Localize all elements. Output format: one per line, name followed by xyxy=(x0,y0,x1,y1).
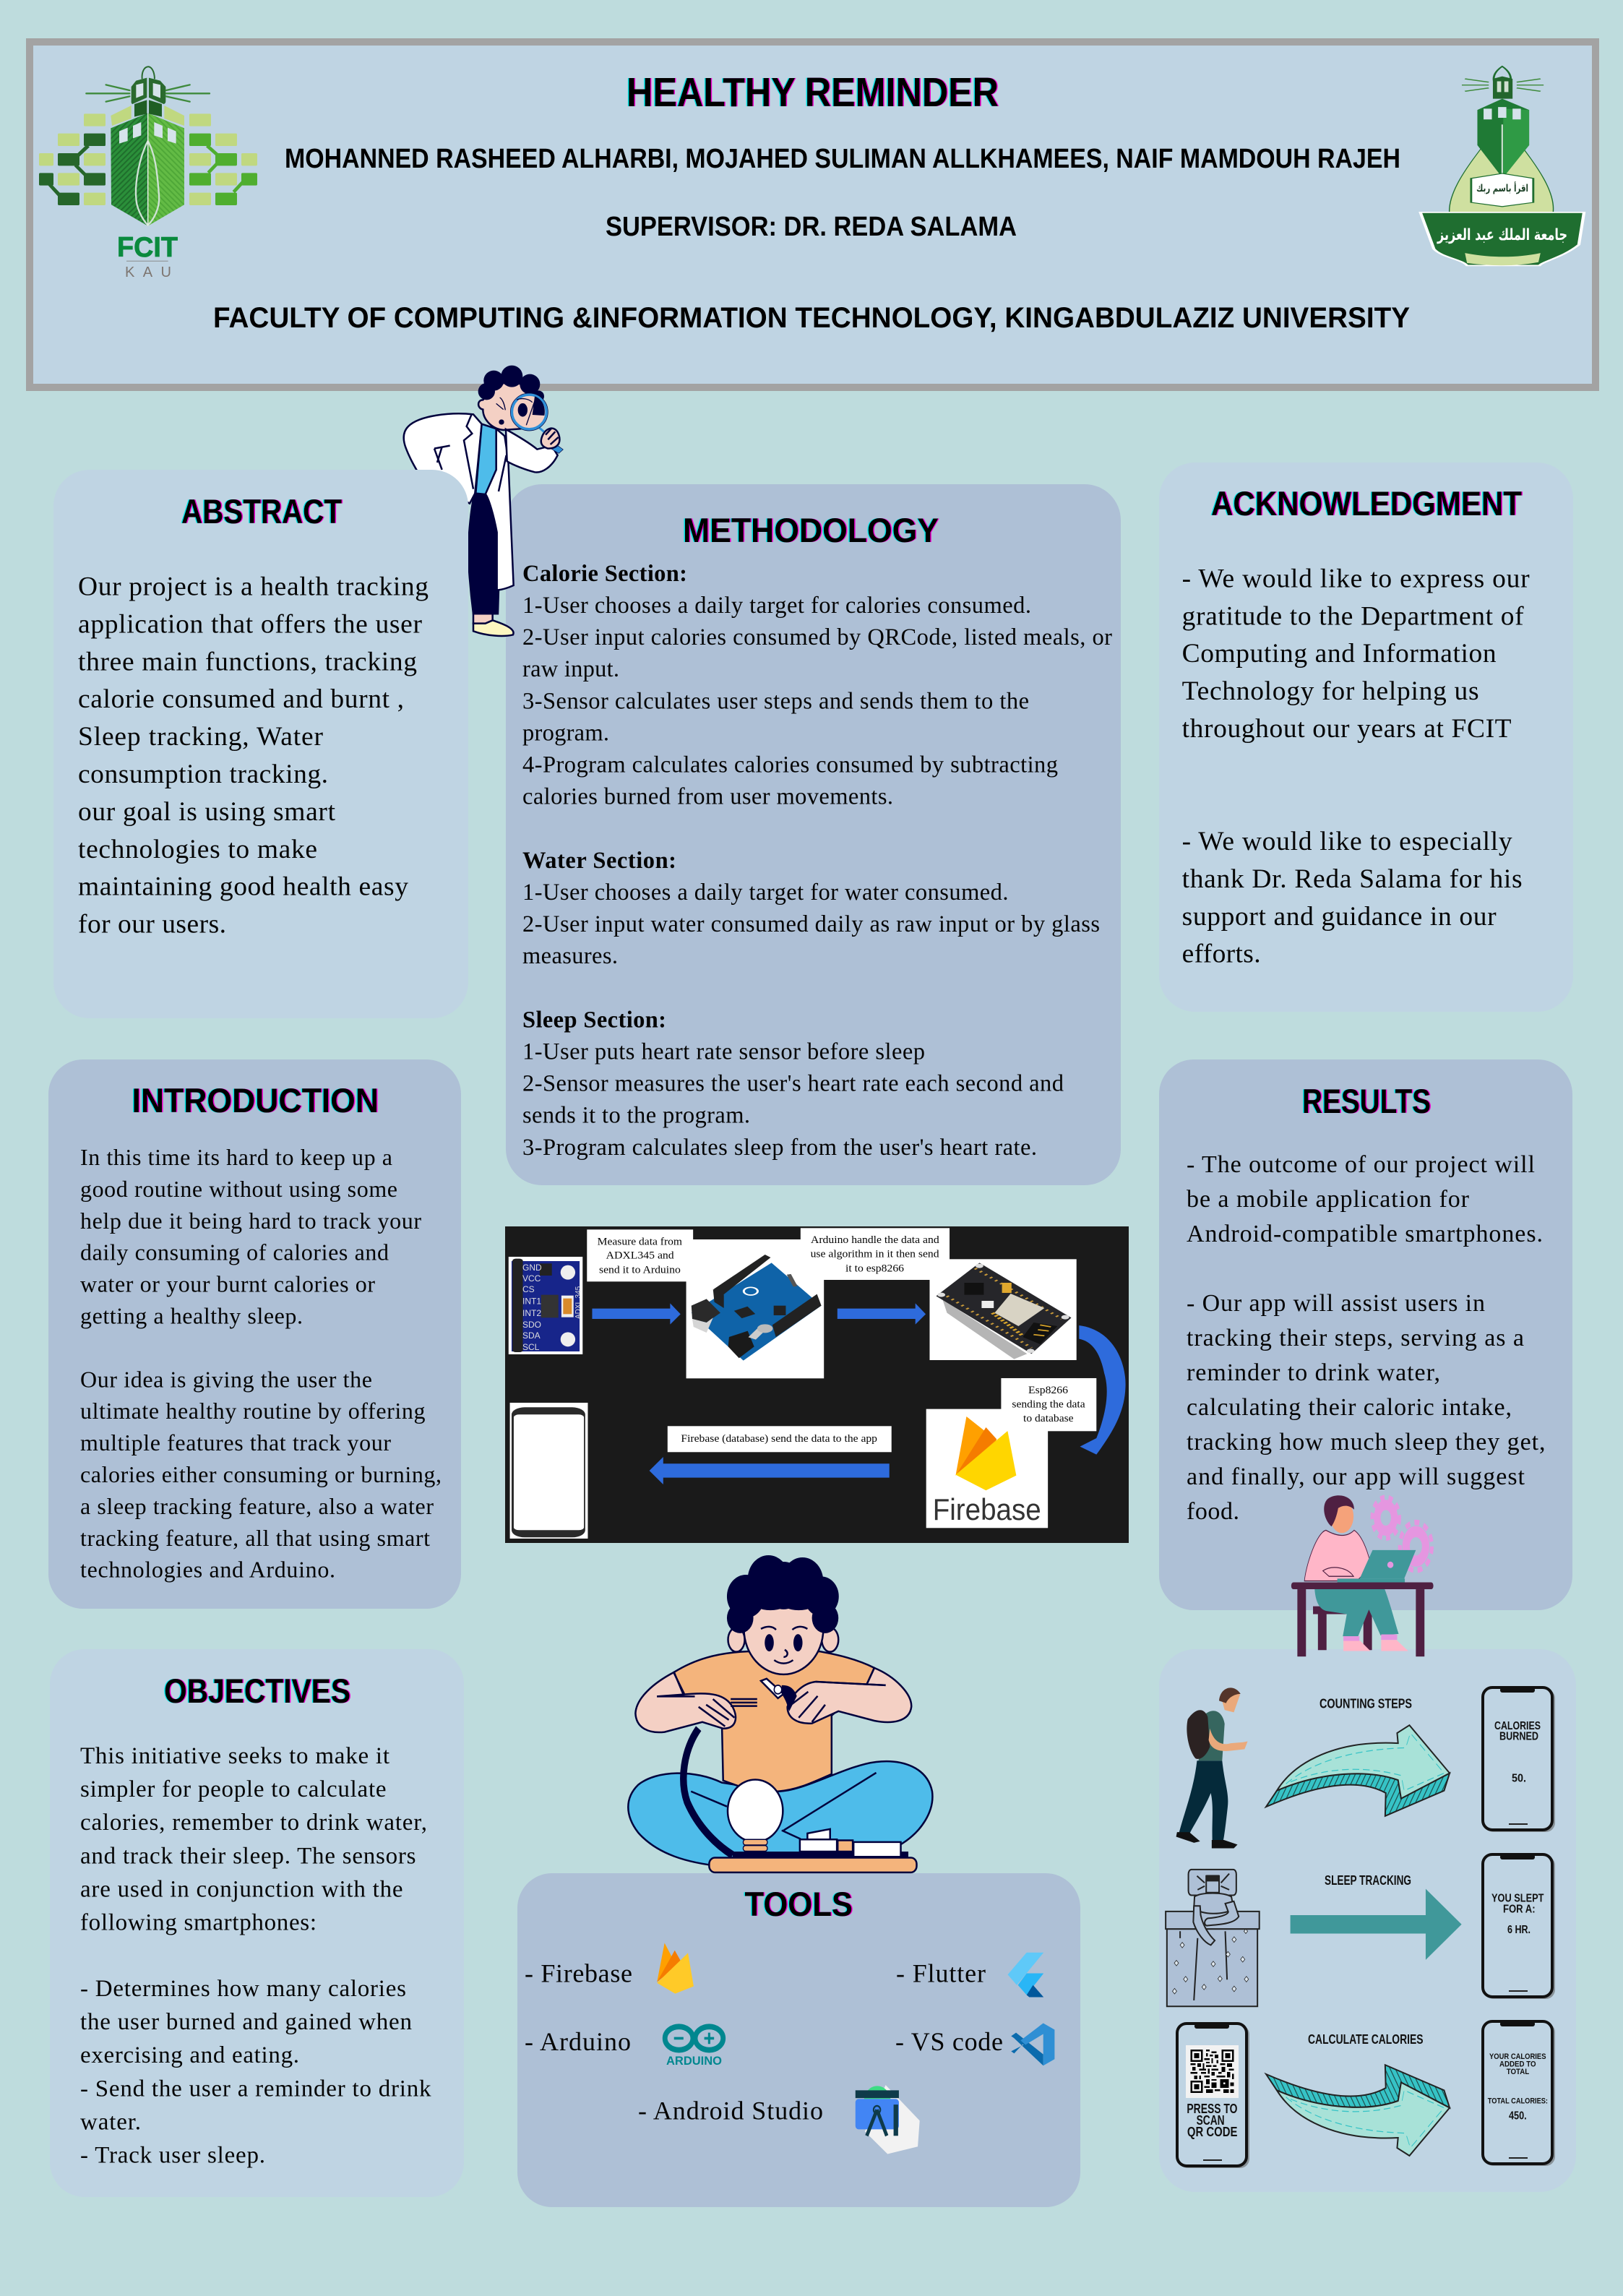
phone: scan QR code: SCAN xyxy=(1197,2113,1225,2128)
body text: program. xyxy=(522,720,609,746)
phone: you slept: 6 HR. xyxy=(1507,1924,1531,1936)
heading: INTRODUCTION xyxy=(132,1081,379,1119)
tool labels: - Arduino xyxy=(525,2027,631,2056)
phone: total calories: TOTAL CALORIES: xyxy=(1488,2097,1548,2106)
body text: consumption tracking. xyxy=(78,760,328,789)
body text: - Send the user a reminder to drink xyxy=(80,2076,431,2102)
heading: RESULTS xyxy=(1302,1082,1431,1120)
tool labels xyxy=(525,1959,1003,2125)
body text: tracking how much sleep they get, xyxy=(1187,1429,1545,1456)
curved arrow xyxy=(1079,1325,1126,1455)
caption: esp8266: sending the data xyxy=(1012,1398,1085,1410)
body text: food. xyxy=(1187,1498,1239,1525)
body text: reminder to drink water, xyxy=(1187,1359,1440,1386)
body text: - We would like to express our xyxy=(1182,564,1530,593)
caption: measure: Measure data from xyxy=(598,1236,682,1247)
icon: vs code xyxy=(1011,2023,1054,2065)
firebase image xyxy=(926,1409,1048,1528)
tool labels: - Flutter xyxy=(896,1959,986,1987)
body text: thank Dr. Reda Salama for his xyxy=(1182,864,1523,894)
body text: 3-Program calculates sleep from the user's heart rate. xyxy=(522,1135,1037,1161)
phone: total calories: TOTAL xyxy=(1507,2068,1529,2076)
sensor pin labels: VCC xyxy=(522,1273,541,1284)
body text: Water Section: xyxy=(522,848,676,874)
arrow xyxy=(650,1457,890,1484)
body text: 1-User chooses a daily target for calories consumed. xyxy=(522,593,1031,619)
body text: Calorie Section: xyxy=(522,561,687,587)
caption: measure xyxy=(598,1236,682,1276)
sensor pin labels: SDO xyxy=(522,1320,541,1330)
sensor pin labels: INT1 xyxy=(522,1297,541,1307)
body text: Android-compatible smartphones. xyxy=(1187,1221,1543,1247)
heading: METHODOLOGY xyxy=(683,511,939,549)
body text: efforts. xyxy=(1182,940,1261,969)
arrow xyxy=(592,1303,681,1325)
body text: three main functions, tracking xyxy=(78,647,417,676)
phone image xyxy=(510,1403,587,1539)
body text: - Track user sleep. xyxy=(80,2142,265,2168)
phone: you slept: FOR A: xyxy=(1503,1904,1536,1916)
phone: calories burned: 50. xyxy=(1512,1773,1526,1785)
phone: total calories: 450. xyxy=(1509,2110,1527,2122)
sensor image xyxy=(509,1257,582,1354)
body text xyxy=(80,1743,431,2168)
body text: daily consuming of calories and xyxy=(80,1239,389,1265)
body text: our goal is using smart xyxy=(78,797,336,827)
panel: introduction xyxy=(48,1059,461,1609)
icon: flutter xyxy=(1008,1953,1043,1997)
phone: you slept xyxy=(1483,1854,1555,1999)
caption: measure: ADXL345 and xyxy=(606,1250,674,1262)
body text: ultimate healthy routine by offering xyxy=(80,1398,425,1424)
sensor pin labels: ADXL 345 xyxy=(574,1286,582,1319)
label: sleep tracking: SLEEP TRACKING xyxy=(1325,1873,1411,1888)
body text: for our users. xyxy=(78,910,226,940)
panel: results xyxy=(1159,1059,1572,1610)
body text: - We would like to especially xyxy=(1182,827,1512,856)
arrow xyxy=(838,1303,926,1325)
heading: OBJECTIVES xyxy=(164,1672,350,1710)
icon: QR code xyxy=(1191,2050,1234,2093)
body text: maintaining good health easy xyxy=(78,872,408,902)
body text: 2-User input water consumed daily as raw input or by glass xyxy=(522,911,1100,937)
curved arrow: calories xyxy=(1266,2065,1450,2156)
character: scientist with magnifying glass xyxy=(404,366,563,636)
body text: water or your burnt calories or xyxy=(80,1271,375,1297)
icon: firebase xyxy=(657,1943,694,1994)
body text: getting a healthy sleep. xyxy=(80,1302,303,1328)
body text: tracking feature, all that using smart xyxy=(80,1525,430,1551)
sensor pin labels: INT2 xyxy=(522,1308,541,1318)
caption: firebase: Firebase (database) send the data to the app xyxy=(681,1433,877,1445)
body text xyxy=(80,1144,442,1583)
phone: you slept: YOU SLEPT xyxy=(1491,1892,1544,1904)
phone: calories burned: CALORIES xyxy=(1494,1720,1541,1732)
body text xyxy=(78,572,429,940)
body text: Sleep tracking, Water xyxy=(78,722,324,752)
body text: calculating their caloric intake, xyxy=(1187,1394,1512,1421)
body text: raw input. xyxy=(522,656,619,682)
caption: arduino xyxy=(811,1234,939,1274)
arduino wordmark: ARDUINO xyxy=(666,2054,722,2068)
panel: methodology xyxy=(506,484,1121,1185)
supervisor: SUPERVISOR: DR. REDA SALAMA xyxy=(606,212,1017,242)
caption: esp8266: to database xyxy=(1023,1413,1074,1424)
tool labels: - VS code xyxy=(895,2027,1003,2056)
caption: arduino: Arduino handle the data and xyxy=(811,1234,939,1246)
phone: calories burned: BURNED xyxy=(1499,1731,1538,1743)
icon: arduino xyxy=(665,2026,723,2050)
body text: Technology for helping us xyxy=(1182,676,1479,706)
illustration: sleeping man xyxy=(1166,1870,1260,2006)
curved arrow: steps to calories xyxy=(1266,1725,1450,1816)
panel: results illustrations xyxy=(1159,1649,1576,2192)
phone: calories burned xyxy=(1483,1687,1555,1832)
body text: be a mobile application for xyxy=(1187,1186,1470,1213)
body text: technologies and Arduino. xyxy=(80,1557,335,1583)
sensor pin labels xyxy=(522,1263,582,1352)
body text: are used in conjunction with the xyxy=(80,1876,403,1902)
panel: abstract xyxy=(53,470,468,1018)
body text: water. xyxy=(80,2109,141,2135)
caption: esp8266: Esp8266 xyxy=(1028,1385,1069,1396)
body text xyxy=(1187,1151,1545,1525)
body text: - The outcome of our project will xyxy=(1187,1151,1535,1178)
body text xyxy=(522,561,1112,1161)
character: person at laptop with gears xyxy=(1291,1495,1434,1656)
body text: Sleep Section: xyxy=(522,1007,666,1033)
tool labels: - Firebase xyxy=(525,1959,632,1987)
logo: FCIT xyxy=(39,66,257,280)
body text: - Our app will assist users in xyxy=(1187,1290,1485,1317)
body text: calories, remember to drink water, xyxy=(80,1810,427,1836)
caption: arduino: use algorithm in it then send xyxy=(811,1248,939,1260)
logo sub-wordmark: KAU xyxy=(125,265,171,280)
body text: 2-User input calories consumed by QRCode, listed meals, or xyxy=(522,624,1112,650)
body text: exercising and eating. xyxy=(80,2042,299,2068)
label: calculate calories: CALCULATE CALORIES xyxy=(1308,2032,1424,2047)
body text: 1-User puts heart rate sensor before sleep xyxy=(522,1039,925,1065)
logo: King Abdulaziz University xyxy=(1421,66,1584,265)
straight arrow: sleep tracking xyxy=(1291,1889,1462,1960)
body text: sends it to the program. xyxy=(522,1103,750,1129)
tool labels: - Android Studio xyxy=(638,2096,823,2125)
sensor pin labels: SDA xyxy=(522,1330,541,1341)
panel: acknowledgment xyxy=(1159,463,1573,1012)
body text: Computing and Information xyxy=(1182,639,1497,668)
label: counting steps: COUNTING STEPS xyxy=(1320,1697,1412,1711)
body text: help due it being hard to track your xyxy=(80,1208,421,1234)
caption: measure: send it to Arduino xyxy=(599,1264,681,1276)
body text: support and guidance in our xyxy=(1182,902,1497,932)
body text: Our idea is giving the user the xyxy=(80,1366,372,1392)
body text: Our project is a health tracking xyxy=(78,572,429,601)
icon: android studio xyxy=(856,2085,920,2154)
panel: header xyxy=(30,42,1596,387)
body text: following smartphones: xyxy=(80,1909,317,1935)
phone: scan QR code: PRESS TO xyxy=(1187,2102,1237,2116)
esp8266 image xyxy=(929,1259,1077,1360)
body text: calorie consumed and burnt , xyxy=(78,684,404,714)
logo ribbon text: جامعة الملك عبد العزيز xyxy=(1437,226,1567,244)
caption: esp8266 xyxy=(1012,1385,1085,1424)
phone: total calories: ADDED TO xyxy=(1499,2060,1536,2068)
body text: measures. xyxy=(522,943,618,969)
sensor pin labels: CS xyxy=(522,1284,535,1294)
body text: application that offers the user xyxy=(78,609,422,639)
body text: good routine without using some xyxy=(80,1176,397,1202)
caption: arduino: it to esp8266 xyxy=(845,1263,905,1274)
illustration: man walking with phone xyxy=(1176,1687,1248,1848)
title: HEALTHY REMINDER xyxy=(627,69,999,116)
body text: the user burned and gained when xyxy=(80,2009,412,2035)
body text: a sleep tracking feature, also a water xyxy=(80,1493,434,1519)
diagram: hardware data flow xyxy=(505,1226,1129,1543)
heading: TOOLS xyxy=(744,1885,853,1923)
phone: total calories xyxy=(1483,2021,1555,2166)
body text: and finally, our app will suggest xyxy=(1187,1463,1525,1490)
body text: This initiative seeks to make it xyxy=(80,1743,389,1769)
body text: throughout our years at FCIT xyxy=(1182,714,1512,744)
body text: simpler for people to calculate xyxy=(80,1776,386,1802)
body text: 3-Sensor calculates user steps and sends them to the xyxy=(522,688,1029,714)
body text: In this time its hard to keep up a xyxy=(80,1144,392,1170)
panel: objectives xyxy=(50,1649,464,2197)
arduino image xyxy=(686,1239,824,1378)
body text xyxy=(1182,564,1530,969)
body text: 4-Program calculates calories consumed by subtracting xyxy=(522,752,1058,778)
body text: 1-User chooses a daily target for water consumed. xyxy=(522,880,1009,906)
body text: gratitude to the Department of xyxy=(1182,601,1524,631)
logo wordmark: FCIT xyxy=(117,232,178,263)
phone: scan QR code xyxy=(1177,2024,1249,2168)
sensor pin labels: GND xyxy=(522,1263,542,1273)
phone: total calories: YOUR CALORIES xyxy=(1489,2052,1546,2061)
faculty: FACULTY OF COMPUTING &INFORMATION TECHNOLOGY, KINGABDULAZIZ UNIVERSITY xyxy=(213,302,1410,334)
body text: 2-Sensor measures the user's heart rate each second and xyxy=(522,1071,1064,1097)
body text: multiple features that track your xyxy=(80,1429,391,1456)
body text: calories either consuming or burning, xyxy=(80,1461,442,1487)
body text: calories burned from user movements. xyxy=(522,784,893,810)
authors: MOHANNED RASHEED ALHARBI, MOJAHED SULIMAN ALLKHAMEES, NAIF MAMDOUH RAJEH xyxy=(285,144,1400,174)
character: mechanic wiring a light bulb xyxy=(628,1555,932,1873)
heading: ABSTRACT xyxy=(181,492,342,530)
body text: - Determines how many calories xyxy=(80,1976,406,2002)
body text: and track their sleep. The sensors xyxy=(80,1843,416,1869)
firebase wordmark: Firebase xyxy=(933,1492,1041,1526)
phone: scan QR code: QR CODE xyxy=(1187,2125,1237,2139)
sensor pin labels: SCL xyxy=(522,1342,540,1352)
heading: ACKNOWLEDGMENT xyxy=(1211,484,1522,523)
body text: tracking their steps, serving as a xyxy=(1187,1325,1524,1351)
caption boxes xyxy=(587,1228,1096,1452)
logo book text: اقرأ باسم ربك xyxy=(1476,181,1528,194)
body text: technologies to make xyxy=(78,835,317,864)
panel: tools xyxy=(517,1873,1080,2207)
